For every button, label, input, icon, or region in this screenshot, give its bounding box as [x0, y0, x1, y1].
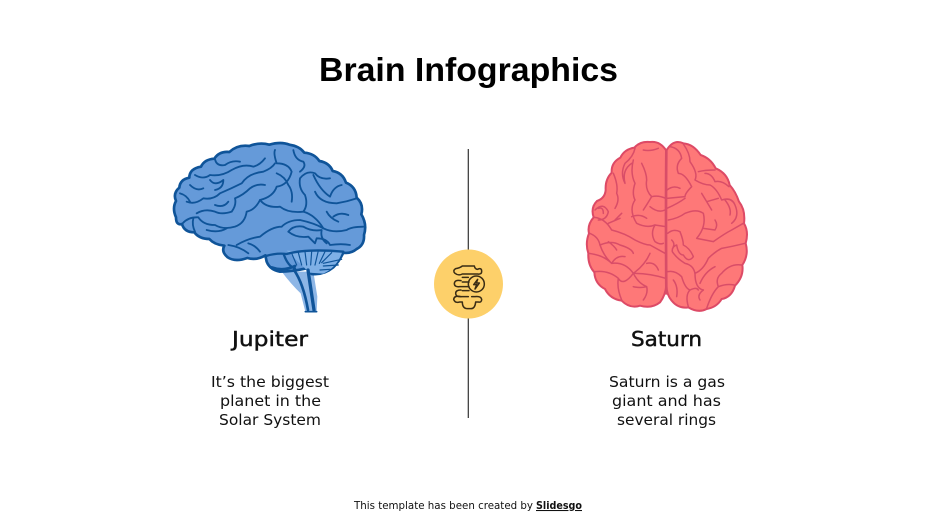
text block: Saturn description: several rings — [617, 411, 716, 429]
text block: Jupiter description — [211, 373, 329, 429]
text block: Jupiter description: It’s the biggest — [211, 373, 329, 391]
text block: Saturn description — [609, 373, 725, 429]
text block: Saturn description: Saturn is a gas — [609, 373, 725, 391]
icon: red brain top view — [587, 142, 747, 311]
title: Brain Infographics — [319, 51, 618, 88]
sulci — [180, 150, 363, 253]
divider: upper line — [468, 149, 469, 250]
panel: Jupiter — [174, 143, 365, 429]
text block: Jupiter description: Solar System — [219, 411, 321, 429]
heading: Jupiter: Jupiter — [230, 327, 309, 351]
icon: spine badge — [434, 250, 503, 318]
footer credit: This template has been created by — [353, 500, 533, 512]
footer credit: Slidesgo — [536, 500, 582, 512]
icon: blue brain side view — [174, 143, 365, 312]
text block: Saturn description: giant and has — [612, 392, 721, 410]
divider: lower line — [468, 318, 469, 418]
text block: Jupiter description: planet in the — [220, 392, 321, 410]
cerebellum — [266, 250, 343, 312]
heading: Saturn: Saturn — [631, 327, 702, 351]
panel: Saturn — [587, 142, 747, 429]
